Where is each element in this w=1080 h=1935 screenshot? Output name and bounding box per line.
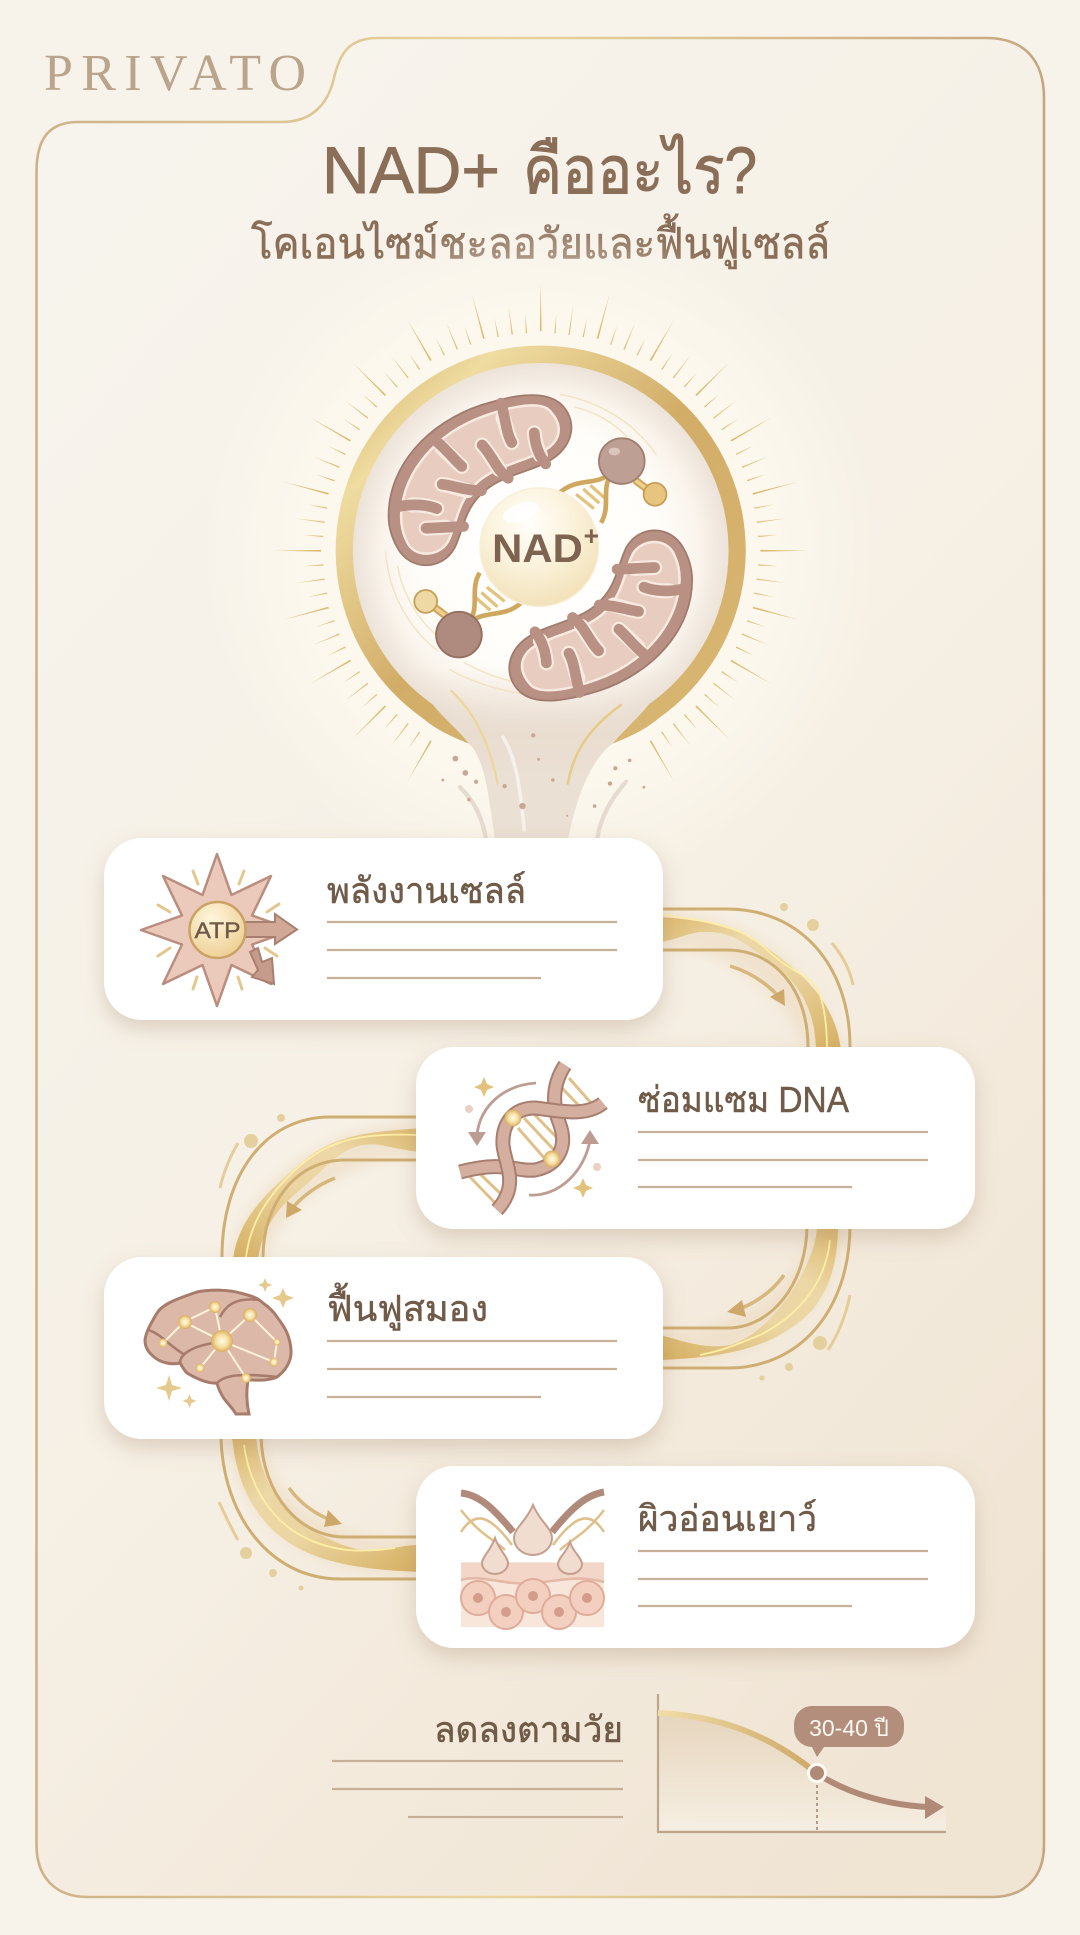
- particles: [441, 733, 645, 817]
- molecule bottom-left: [414, 573, 521, 657]
- gold ring: [336, 346, 746, 744]
- icon: skin layers: [461, 1492, 604, 1629]
- title: [251, 133, 830, 269]
- arrow: [289, 1488, 342, 1527]
- title: คืออะไร?: [523, 133, 757, 207]
- connector: card 3 to card 4: [219, 1435, 420, 1590]
- ATP label: ATP: [194, 918, 240, 943]
- hero: NAD+ bulb illustration: [275, 285, 807, 844]
- callout: age range: 30-40 ปี: [809, 1715, 889, 1741]
- text placeholder lines: [327, 922, 617, 978]
- arrow: [286, 1178, 335, 1218]
- panel: youthful skin card: [416, 1466, 975, 1648]
- text placeholder lines: [332, 1761, 623, 1817]
- arrow: [727, 1275, 784, 1317]
- chart: NAD+ decline curve: [658, 1694, 946, 1832]
- title: NAD+: [322, 133, 500, 207]
- connector: card 2 to card 3 right side: [660, 1225, 850, 1380]
- heading: พลังงานเซลล์: [327, 870, 526, 911]
- faint swirl arcs: [386, 394, 656, 694]
- callout: age range: [794, 1706, 904, 1757]
- sparkle dots: [219, 1502, 304, 1590]
- sparkle dots: [780, 903, 853, 985]
- connector: card 1 to card 2: [660, 903, 853, 1050]
- panel: cell energy card: [104, 838, 663, 1020]
- icon: DNA helix: [460, 1065, 603, 1210]
- plus sign: +: [584, 521, 599, 551]
- logo: PRIVATO: [44, 45, 306, 102]
- heading: ฟื้นฟูสมอง: [327, 1282, 488, 1331]
- NAD+ sphere: [480, 488, 599, 606]
- mitochondrion top-left: [389, 395, 571, 565]
- liquid stem highlights: [451, 691, 626, 837]
- text placeholder lines: [638, 1132, 928, 1187]
- panel: DNA repair card: [416, 1047, 975, 1229]
- text placeholder lines: [327, 1341, 617, 1397]
- icon: ATP burst: [141, 854, 297, 1006]
- icon: brain: [145, 1278, 294, 1414]
- text block: decline with age: ลดลงตามวัย: [434, 1709, 623, 1750]
- sparkle dots: [220, 1114, 285, 1188]
- subtitle: โคเอนไซม์ชะลอวัยและฟื้นฟูเซลล์: [251, 213, 830, 269]
- heading: ผิวอ่อนเยาว์: [638, 1498, 817, 1539]
- heading: ซ่อมแซม DNA: [638, 1079, 849, 1120]
- mitochondrion bottom-right: [509, 530, 692, 701]
- sparkle dots: [760, 1295, 850, 1380]
- sun rays: [275, 285, 807, 782]
- bulb and stem fill: [336, 346, 746, 844]
- hero glow: [201, 211, 881, 891]
- molecule top-right: [560, 438, 666, 523]
- panel: brain restoration card: [104, 1257, 663, 1439]
- arrow: [730, 966, 785, 1006]
- NAD+ label: NAD: [492, 527, 583, 571]
- connector: card 2 to card 3: [220, 1114, 420, 1260]
- text placeholder lines: [638, 1551, 928, 1606]
